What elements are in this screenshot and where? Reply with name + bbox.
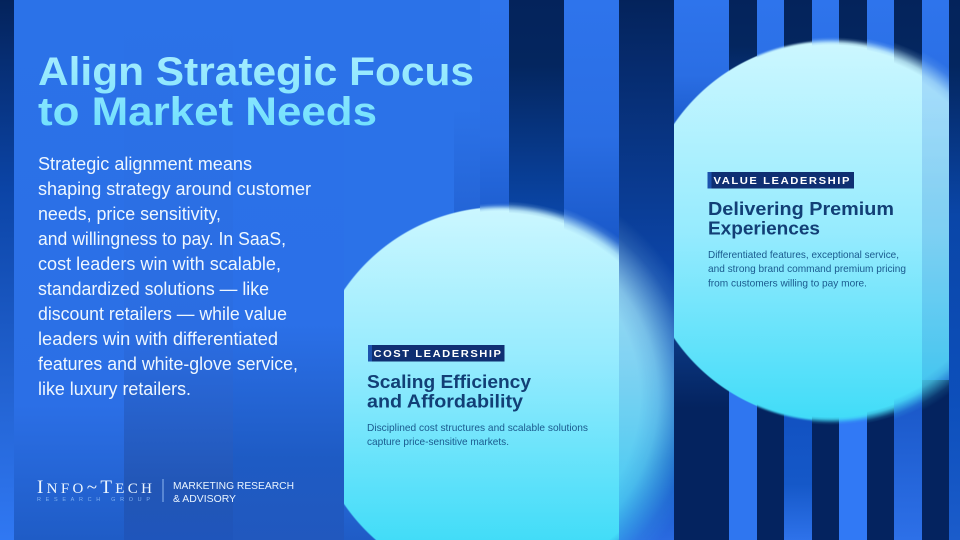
description: cost leadership: capture price-sensitive markets. xyxy=(367,436,509,448)
intro paragraph: and willingness to pay. In SaaS, xyxy=(38,229,286,249)
title xyxy=(38,50,474,134)
intro paragraph: leaders win with differentiated xyxy=(38,329,278,349)
tag: cost leadership: COST LEADERSHIP xyxy=(374,349,502,360)
description: value leadership xyxy=(708,249,906,290)
description: value leadership: and strong brand command premium pricing xyxy=(708,263,906,275)
intro paragraph: Strategic alignment means xyxy=(38,154,252,174)
logo: Info-Tech Research Group, Marketing Research & Advisory: RESEARCH GROUP xyxy=(37,497,150,503)
intro paragraph: discount retailers — while value xyxy=(38,304,287,324)
intro paragraph: standardized solutions — like xyxy=(38,279,269,299)
heading: delivering premium xyxy=(708,199,894,238)
intro paragraph: like luxury retailers. xyxy=(38,379,191,399)
intro paragraph: needs, price sensitivity, xyxy=(38,204,221,224)
panel: cost leadership circle xyxy=(344,190,674,540)
title: Align Strategic Focus xyxy=(38,50,474,94)
logo: Info-Tech Research Group, Marketing Research & Advisory xyxy=(37,477,294,505)
tag: value leadership: VALUE LEADERSHIP xyxy=(714,176,851,187)
panel: value leadership circle xyxy=(674,30,949,435)
tag: value leadership xyxy=(708,172,854,188)
value leadership text xyxy=(708,172,906,290)
heading: delivering premium: Experiences xyxy=(708,218,820,238)
intro paragraph: shaping strategy around customer xyxy=(38,179,311,199)
description: value leadership: Differentiated features, exceptional service, xyxy=(708,249,899,261)
logo: Info-Tech Research Group, Marketing Research & Advisory: & ADVISORY xyxy=(173,493,236,505)
description: cost leadership: Disciplined cost structures and scalable solutions xyxy=(367,422,588,434)
description: cost leadership xyxy=(367,422,588,448)
heading: scaling efficiency: and Affordability xyxy=(367,392,523,412)
heading: delivering premium: Delivering Premium xyxy=(708,199,894,219)
heading: scaling efficiency: Scaling Efficiency xyxy=(367,372,531,392)
logo: Info-Tech Research Group, Marketing Research & Advisory: INFO~TECH xyxy=(37,477,152,498)
intro paragraph: cost leaders win with scalable, xyxy=(38,254,281,274)
tag: cost leadership xyxy=(368,345,504,362)
intro paragraph: features and white-glove service, xyxy=(38,354,298,374)
description: value leadership: from customers willing to pay more. xyxy=(708,278,867,290)
logo: Info-Tech Research Group, Marketing Research & Advisory: MARKETING RESEARCH xyxy=(173,480,294,492)
cost leadership text xyxy=(367,345,588,448)
title: to Market Needs xyxy=(38,90,377,134)
heading: scaling efficiency xyxy=(367,372,531,412)
intro paragraph xyxy=(38,154,311,399)
